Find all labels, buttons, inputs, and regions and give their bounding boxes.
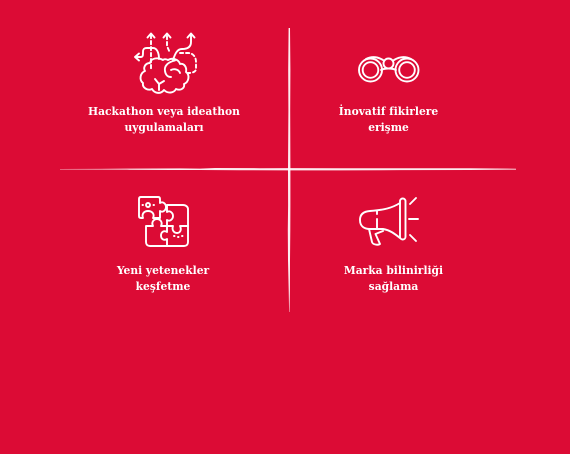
text: Yeni yetenekler keşfetme: Yeni yetenekler: [117, 264, 209, 276]
text: Hackathon veya ideathon uygulamaları: Hackathon veya ideathon: [88, 104, 240, 118]
horizontal divider: [60, 168, 516, 170]
icon: puzzle pieces: [139, 197, 188, 246]
vertical divider: [288, 28, 290, 312]
icon: megaphone: [360, 198, 418, 245]
text: Marka bilinirliği sağlama: sağlama: [369, 280, 418, 292]
text: İnovatif fikirlere erişme: [339, 104, 438, 134]
text: Hackathon veya ideathon uygulamaları: [88, 104, 240, 134]
text: Yeni yetenekler keşfetme: keşfetme: [136, 280, 190, 292]
text: Yeni yetenekler keşfetme: [116, 264, 210, 292]
text: İnovatif fikirlere erişme: erişme: [368, 120, 409, 134]
text: Hackathon veya ideathon uygulamaları: uygulamaları: [124, 120, 204, 134]
text: İnovatif fikirlere erişme: İnovatif fikirlere: [339, 104, 438, 118]
text: Marka bilinirliği sağlama: [344, 264, 443, 292]
text: Marka bilinirliği sağlama: Marka bilinirliği: [344, 264, 443, 276]
icon: binoculars: [359, 57, 418, 82]
icon: brain with arrows: [135, 34, 196, 93]
